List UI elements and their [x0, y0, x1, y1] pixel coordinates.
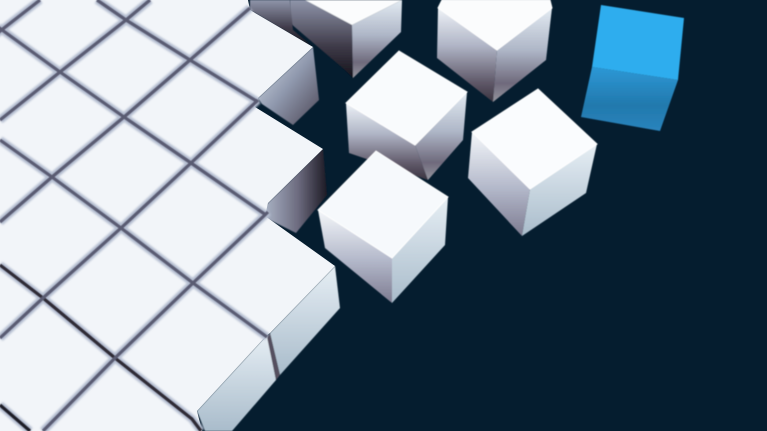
cube: blue	[581, 5, 684, 131]
grid line core	[0, 0, 268, 431]
grid line halo	[0, 0, 268, 431]
cube: upper middle	[437, 0, 552, 102]
cube behind the grid, top edge	[290, 0, 402, 78]
cube: right white	[468, 89, 597, 236]
cube: center	[346, 51, 467, 180]
cube: front free	[318, 151, 448, 303]
side faces of grid cubes	[197, 0, 340, 431]
top surface of grid	[0, 0, 335, 431]
grid of white cubes	[0, 0, 340, 431]
